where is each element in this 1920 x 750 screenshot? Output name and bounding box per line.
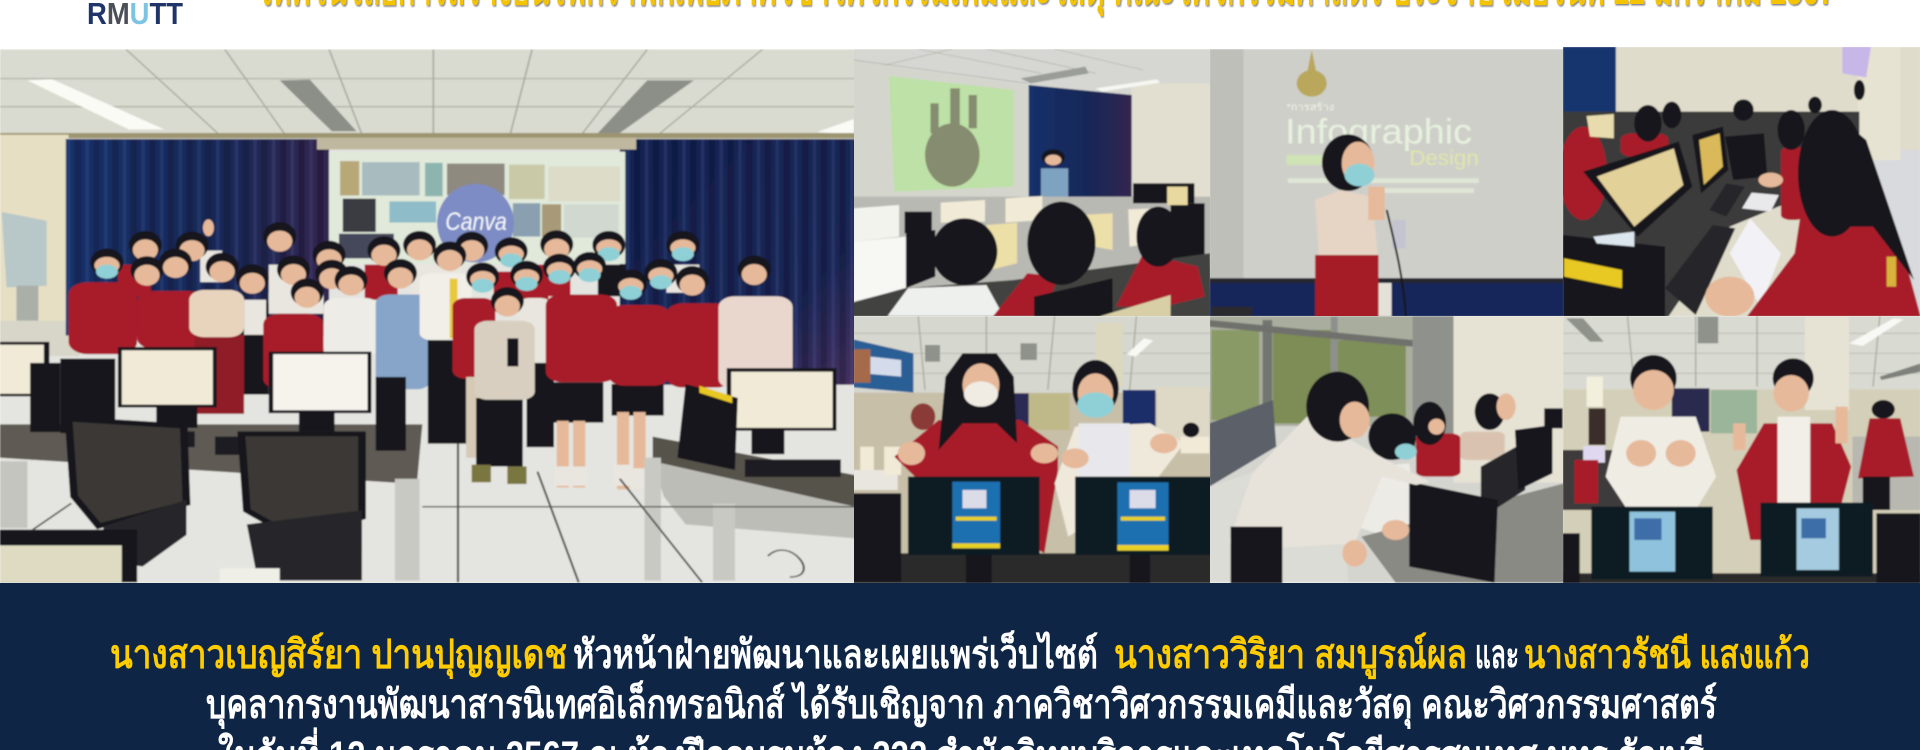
panel: navy caption band xyxy=(0,583,1920,750)
photo: instructor assisting seated student xyxy=(1209,316,1564,583)
text: Design: Design xyxy=(1409,146,1479,170)
text: Infographic: Infographic xyxy=(1285,112,1472,151)
photo: group portrait in Canva training room xyxy=(0,49,856,583)
photo: speaker at projector screen, hand slide xyxy=(850,49,1211,317)
text: Canva logo: Canva xyxy=(445,208,507,236)
text: line 1 yellow second name: นางสาววิริยา สมบูรณ์ผล xyxy=(1114,632,1467,679)
photo: two male students with thumbs up xyxy=(1563,316,1920,583)
photo: two students with posters on monitors xyxy=(850,316,1211,583)
monitors and desks xyxy=(0,424,422,484)
text: line 1 yellow third name: นางสาวรัชนี แสงแก้ว xyxy=(1524,633,1810,677)
text: slide caption: *การสร้าง xyxy=(1286,102,1334,113)
text: line 1 white and: และ xyxy=(1475,633,1519,677)
text: line 1 yellow name: นางสาวเบญสิร์ยา ปานปุญญเดช xyxy=(110,632,567,680)
photo: speaker with microphone, Infographic Design slide xyxy=(1209,49,1564,318)
text: line 1 white role: หัวหน้าฝ่ายพัฒนาและเผยแพร่เว็บไซต์ xyxy=(573,629,1098,677)
photo: students working at computers xyxy=(1559,47,1920,317)
